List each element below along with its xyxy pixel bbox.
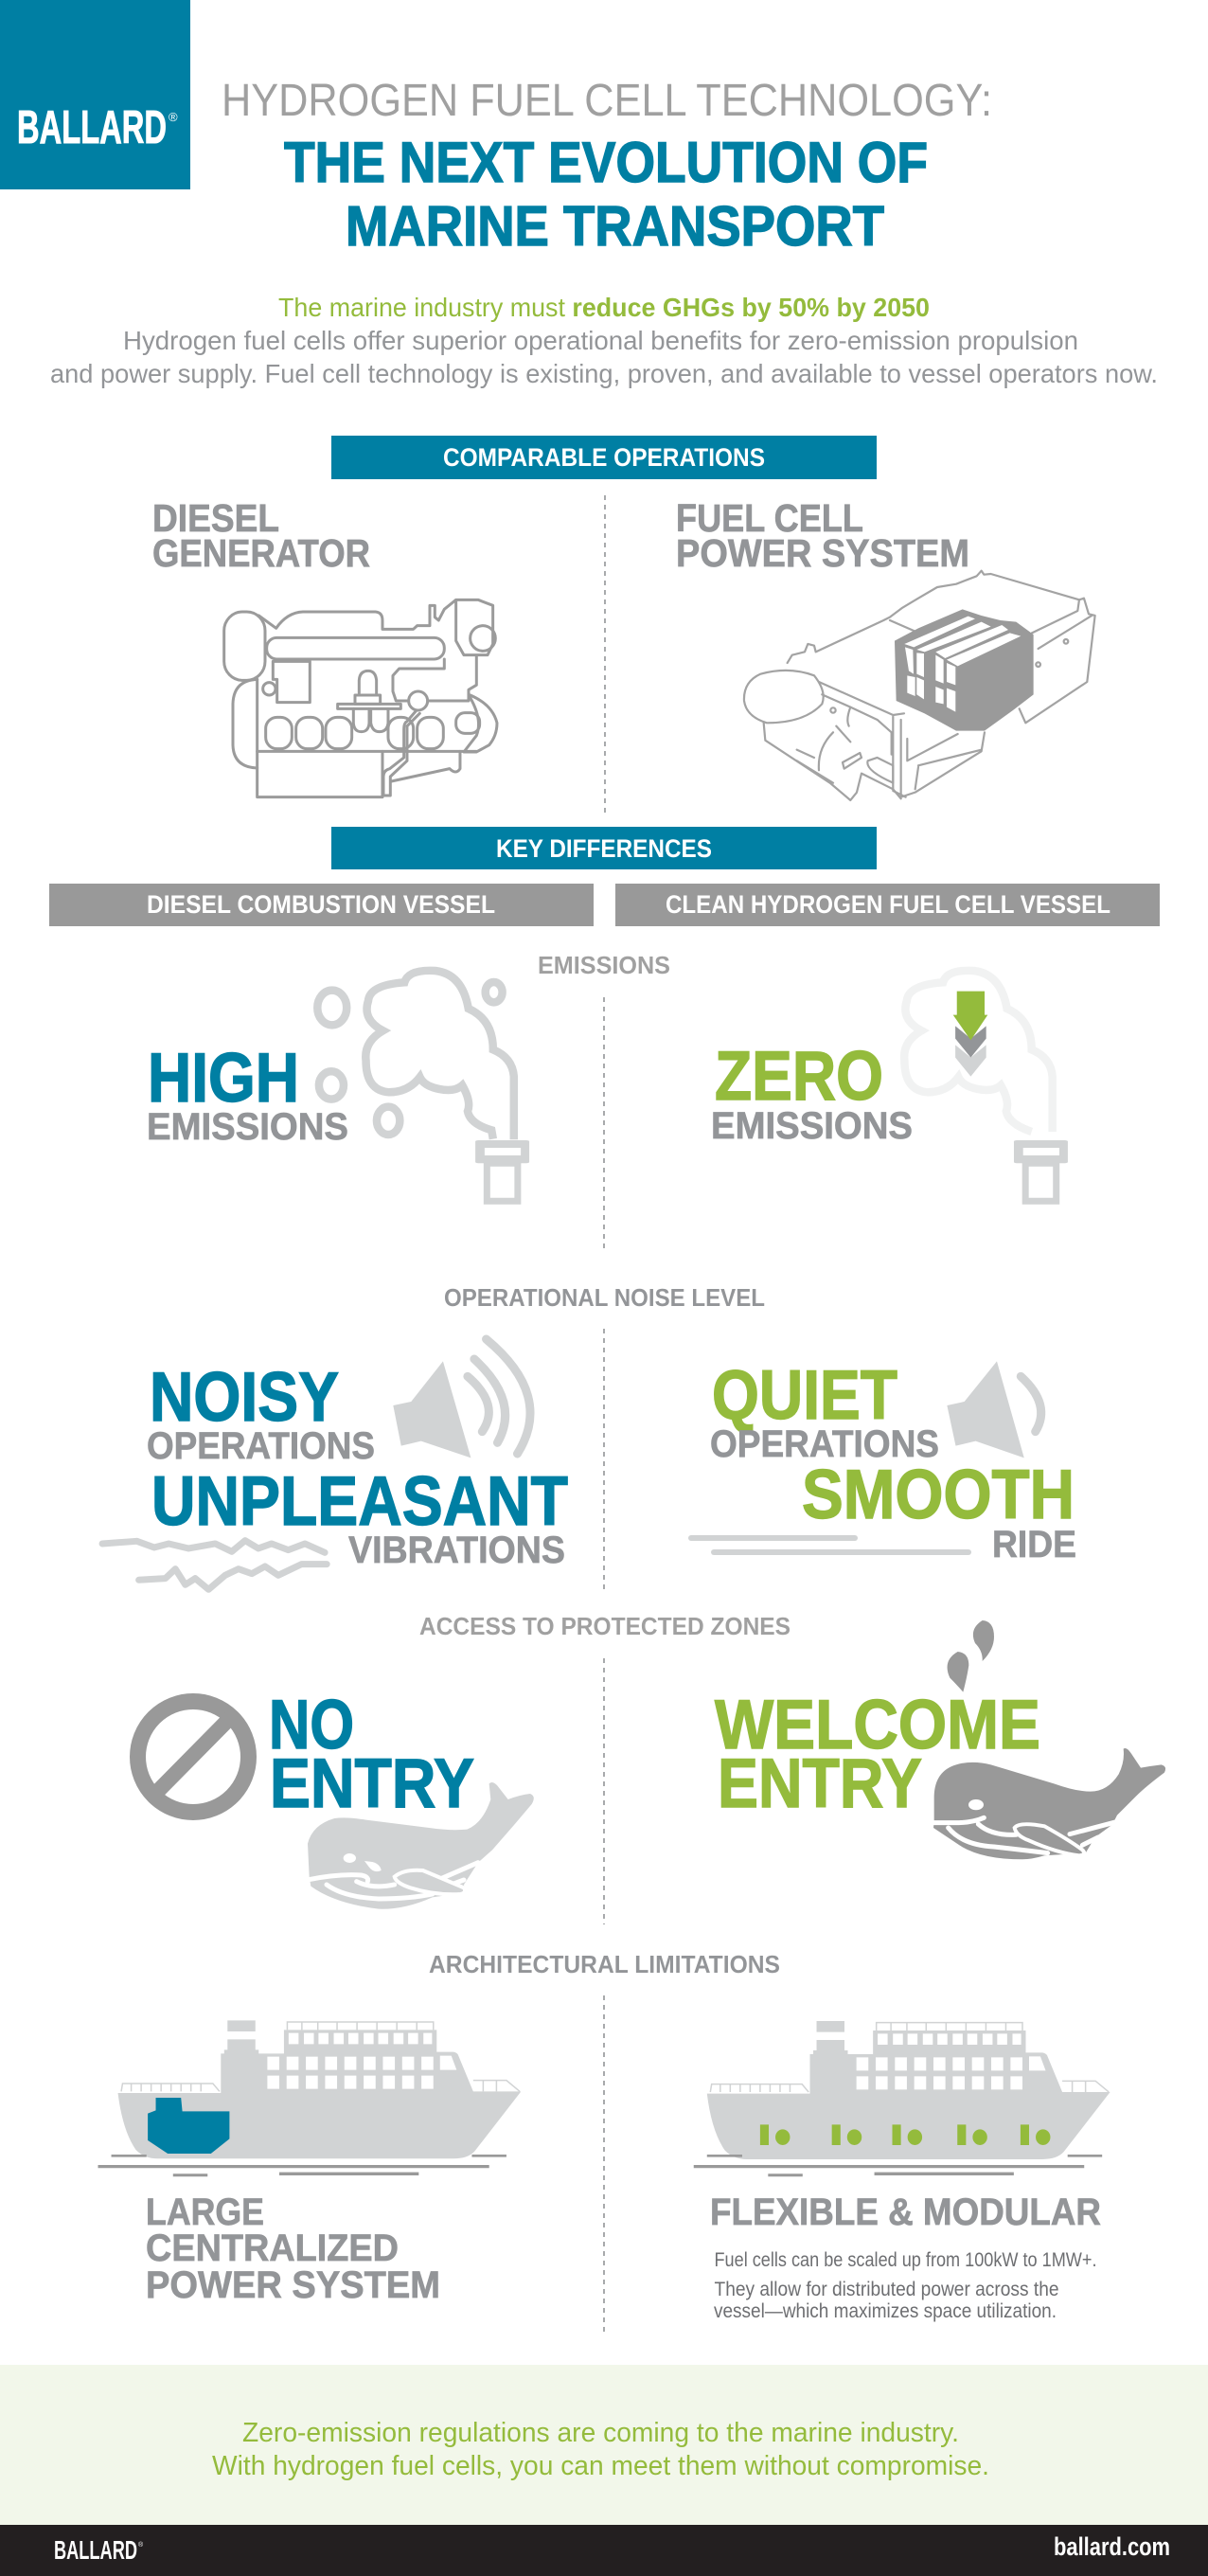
heading: fuel cell power system: FUEL CELL xyxy=(676,496,863,540)
column header: diesel combustion vessel: DIESEL COMBUSTION VESSEL xyxy=(147,890,495,919)
no entry label: ENTRY xyxy=(270,1745,474,1822)
closing callout band: Zero-emission regulations are coming to the marine industry. xyxy=(242,2418,959,2448)
unpleasant vibrations label xyxy=(151,1463,568,1571)
high emissions label xyxy=(147,1040,348,1148)
section heading: operational noise level: OPERATIONAL NOISE LEVEL xyxy=(444,1283,765,1312)
body text: fuel cell scaling: Fuel cells can be scaled up from 100kW to 1MW+. xyxy=(714,2249,1096,2271)
intro text block: Hydrogen fuel cells offer superior operational benefits for zero-emission propulsion xyxy=(123,326,1078,355)
footer bar: ballard.com xyxy=(1054,2532,1170,2561)
quiet operations label xyxy=(710,1357,939,1465)
footer bar: ® xyxy=(138,2541,144,2549)
smooth ride label: RIDE xyxy=(992,1524,1076,1565)
unpleasant vibrations label: UNPLEASANT xyxy=(151,1463,568,1540)
high emissions label: EMISSIONS xyxy=(147,1106,348,1148)
icon: ship with large central engine xyxy=(98,2020,521,2176)
closing callout band xyxy=(0,2365,1208,2525)
section heading: emissions: EMISSIONS xyxy=(538,951,670,979)
no entry label xyxy=(269,1687,474,1822)
icon: ship with distributed fuel cells xyxy=(694,2021,1110,2176)
welcome entry label: ENTRY xyxy=(718,1745,922,1822)
intro text block: The marine industry must reduce GHGs by 50% by 2050 xyxy=(278,293,930,322)
banner: key differences: KEY DIFFERENCES xyxy=(496,834,712,863)
welcome entry label xyxy=(715,1687,1040,1822)
heading: diesel generator: DIESEL xyxy=(152,496,279,540)
icon: quiet speaker xyxy=(947,1361,1041,1458)
body text: fuel cell scaling: vessel—which maximizes space utilization. xyxy=(714,2300,1057,2322)
footer bar: BALLARD xyxy=(54,2535,137,2565)
zero emissions label: EMISSIONS xyxy=(711,1105,913,1147)
heading: fuel cell power system xyxy=(676,496,969,575)
quiet operations label: OPERATIONS xyxy=(710,1423,939,1465)
title xyxy=(222,76,992,258)
noisy operations label: NOISY xyxy=(150,1359,339,1436)
intro text block: and power supply. Fuel cell technology is existing, proven, and available to vessel operators now. xyxy=(50,359,1158,388)
icon: smooth lines xyxy=(688,1535,971,1555)
body text: fuel cell scaling xyxy=(714,2249,1096,2322)
banner: key differences xyxy=(331,827,877,869)
smooth ride label: SMOOTH xyxy=(802,1457,1075,1533)
title: HYDROGEN FUEL CELL TECHNOLOGY: xyxy=(222,76,992,126)
section heading: access to protected zones: ACCESS TO PROTECTED ZONES xyxy=(419,1612,791,1640)
column header: diesel combustion vessel xyxy=(49,884,594,926)
welcome entry label: WELCOME xyxy=(715,1687,1040,1763)
logo: Ballard badge: ® xyxy=(169,110,178,124)
left column label: large centralized power system: LARGE xyxy=(146,2191,264,2233)
title: THE NEXT EVOLUTION OF xyxy=(284,131,928,194)
title: MARINE TRANSPORT xyxy=(346,195,884,258)
logo: Ballard badge xyxy=(0,0,190,189)
left column label: large centralized power system xyxy=(146,2191,440,2306)
intro text block xyxy=(50,293,1158,388)
zero emissions label xyxy=(711,1038,913,1147)
icon: pale whale xyxy=(308,1782,534,1909)
logo: Ballard badge: BALLARD xyxy=(17,102,167,153)
smooth ride label xyxy=(802,1457,1076,1565)
footer bar xyxy=(0,2525,1208,2576)
icon: clean smoke stack with down arrows xyxy=(904,971,1068,1201)
noisy operations label: OPERATIONS xyxy=(147,1425,375,1467)
heading: diesel generator: GENERATOR xyxy=(152,531,370,575)
icon: loud speaker xyxy=(393,1339,530,1458)
column header: clean hydrogen fuel cell vessel: CLEAN HYDROGEN FUEL CELL VESSEL xyxy=(666,890,1110,919)
quiet operations label: QUIET xyxy=(712,1357,897,1434)
icon: no entry sign xyxy=(138,1701,248,1813)
icon: vibration lines xyxy=(102,1541,327,1589)
banner: comparable operations: COMPARABLE OPERATIONS xyxy=(443,443,765,472)
closing callout band: With hydrogen fuel cells, you can meet them without compromise. xyxy=(212,2451,989,2481)
section heading: architectural limitations: ARCHITECTURAL LIMITATIONS xyxy=(429,1950,780,1978)
left column label: large centralized power system: POWER SYSTEM xyxy=(146,2264,440,2306)
icon: heavy smoke stack xyxy=(317,971,529,1201)
high emissions label: HIGH xyxy=(148,1040,299,1117)
banner: comparable operations xyxy=(331,436,877,479)
left column label: large centralized power system: CENTRALIZED xyxy=(146,2227,399,2269)
right column label: flexible and modular: FLEXIBLE & MODULAR xyxy=(710,2191,1101,2233)
no entry label: NO xyxy=(269,1687,354,1763)
icon: fuel cell power module xyxy=(744,571,1095,800)
icon: happy whale with spout xyxy=(933,1620,1165,1859)
icon: diesel engine xyxy=(224,599,497,797)
body text: fuel cell scaling: They allow for distributed power across the xyxy=(714,2279,1058,2300)
noisy operations label xyxy=(147,1359,375,1467)
heading: fuel cell power system: POWER SYSTEM xyxy=(676,531,969,575)
heading: diesel generator xyxy=(152,496,370,575)
zero emissions label: ZERO xyxy=(715,1038,883,1115)
column header: clean hydrogen fuel cell vessel xyxy=(615,884,1160,926)
unpleasant vibrations label: VIBRATIONS xyxy=(348,1530,565,1571)
